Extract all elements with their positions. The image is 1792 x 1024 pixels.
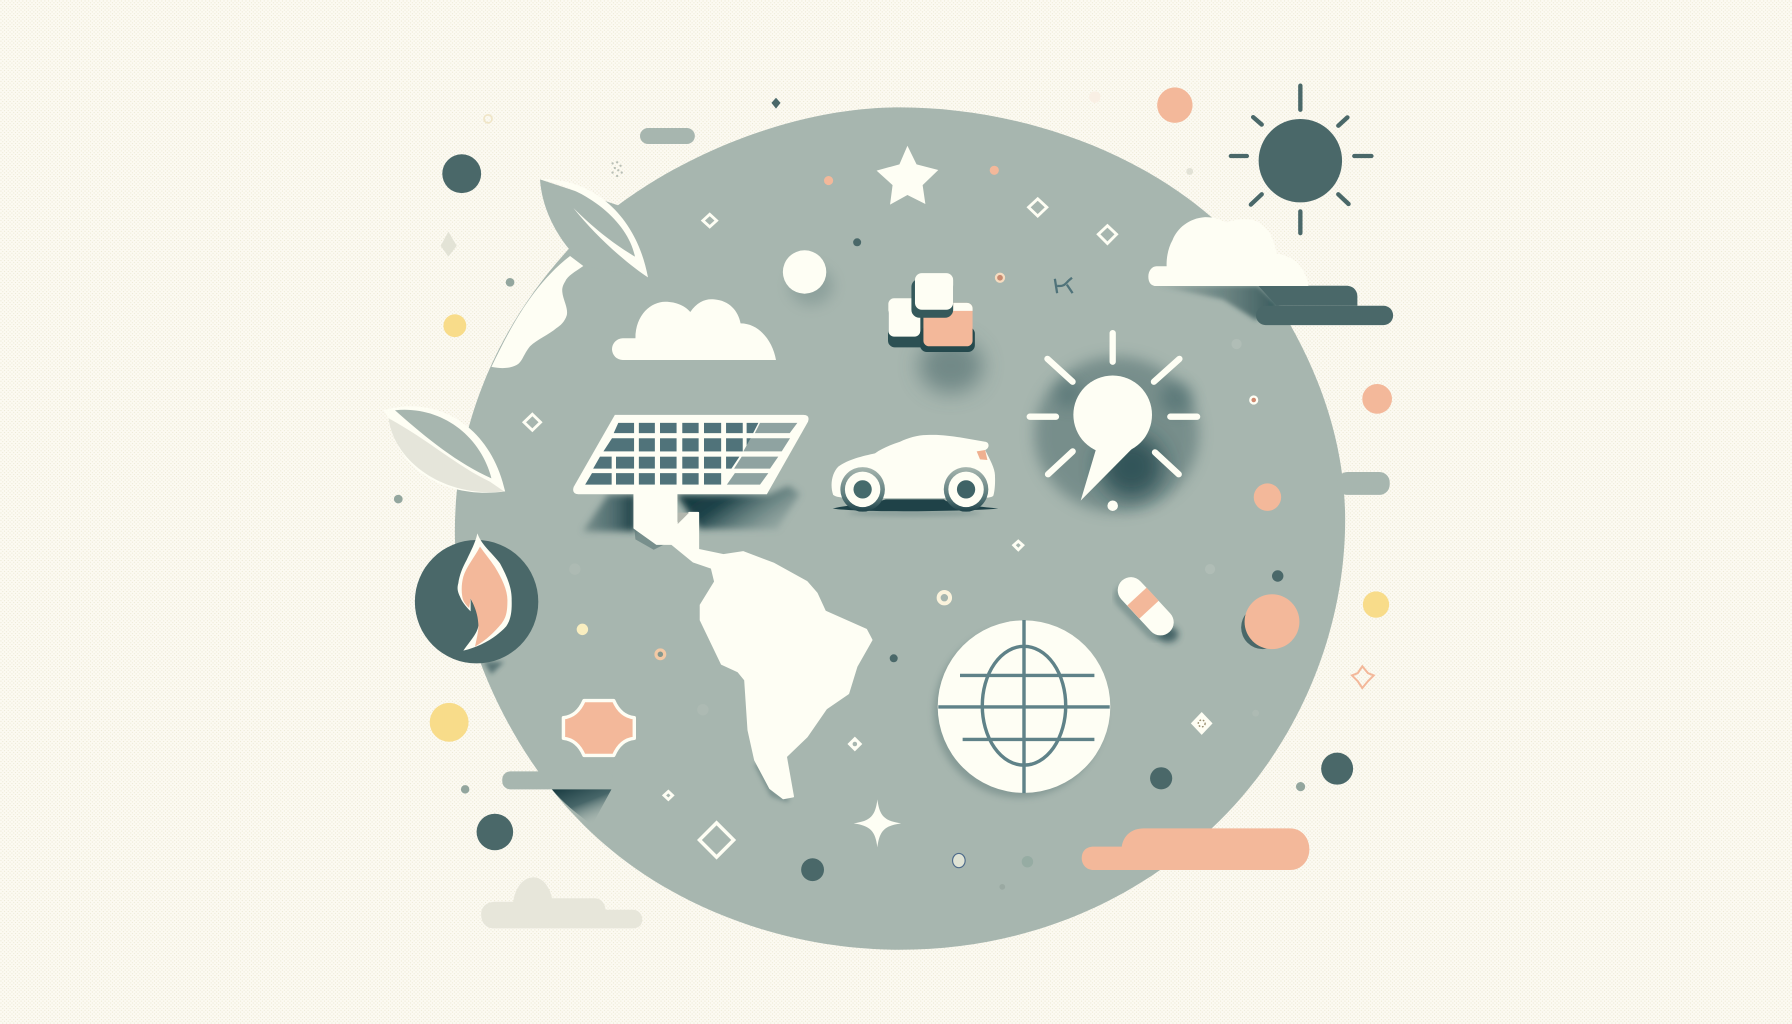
tiny accents [441,91,1374,890]
pill bar: peach [1082,828,1309,870]
dots: peach [824,87,1392,511]
pill [1127,590,1178,642]
solar cells [585,423,758,485]
flame badge [415,533,538,674]
star [877,146,938,205]
small diamonds [524,199,1117,857]
cloud: upper centre [612,299,776,360]
globe [455,107,1345,950]
sun [1231,86,1371,233]
filled speckled diamonds [847,712,1213,751]
moon dot with shadow [783,250,833,305]
cloud: upper right [1148,217,1393,325]
solar panel [573,415,809,550]
dots: yellow [430,314,1389,742]
bar shadow [552,789,611,825]
cloud: bottom faint [481,877,642,928]
stacked blocks [888,273,983,393]
dots: grey [394,278,1305,794]
sparkle [854,799,901,847]
small ring dots [656,274,1257,868]
leaf: left [383,406,505,493]
pill bars: grey [502,128,1390,789]
car [832,435,998,517]
continent: north america fragment [491,256,583,368]
solar cells: light section [727,423,797,485]
speckle cluster [611,161,623,177]
south america with panel post [634,494,872,800]
lightbulb [1030,333,1199,512]
globe icon [934,620,1110,798]
dots: dark [442,154,1353,881]
leaf: top [540,179,648,278]
peach badge [563,701,634,755]
peach orb [1241,594,1299,649]
